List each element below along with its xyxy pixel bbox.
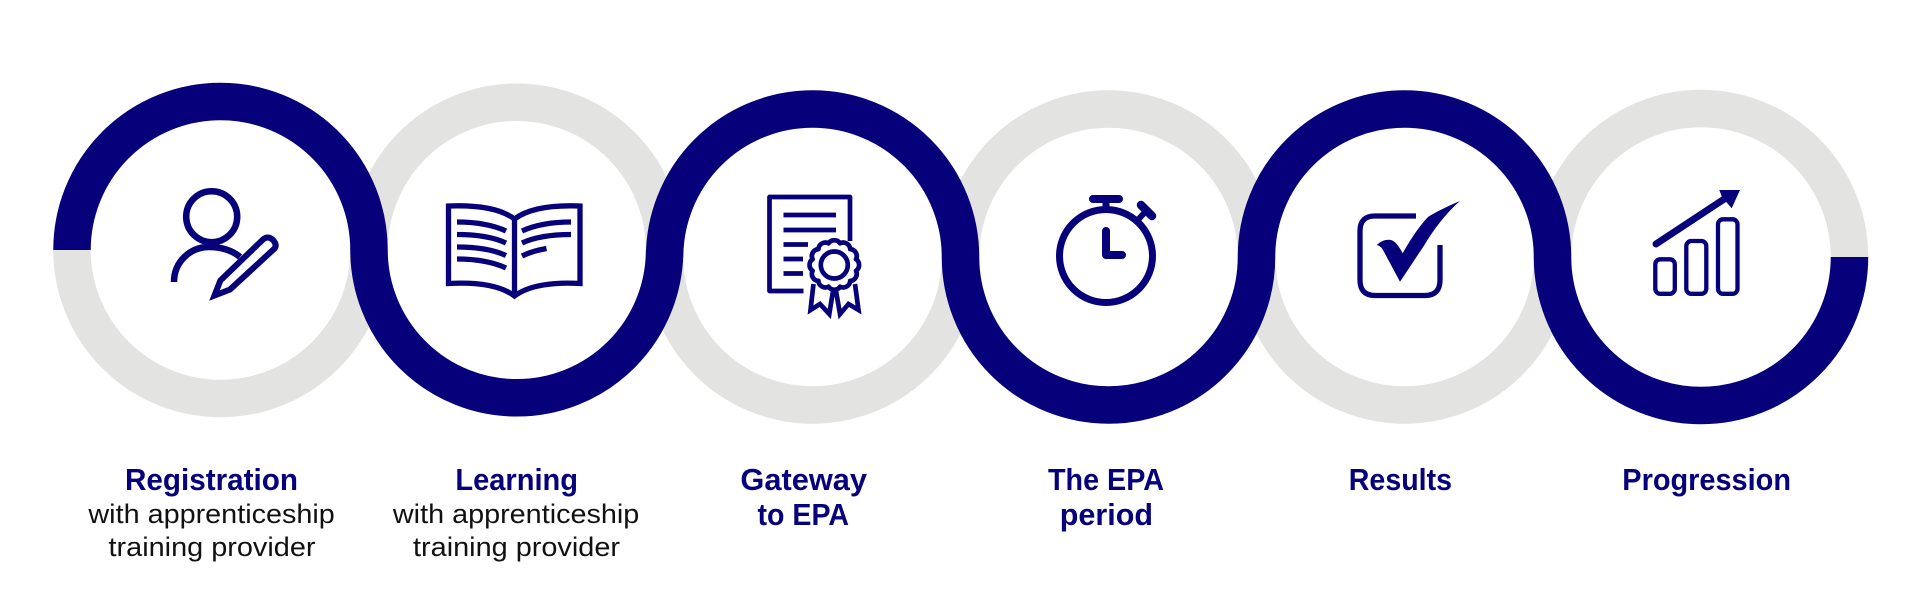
icon: person with pencil bbox=[174, 191, 276, 296]
label: Learning: with apprenticeship bbox=[392, 499, 639, 529]
label: Learning bbox=[392, 462, 639, 562]
label: Registration bbox=[87, 462, 335, 562]
label: The EPA period bbox=[1048, 462, 1164, 532]
icon: rising bar chart bbox=[1655, 190, 1740, 294]
label: Progression: Progression bbox=[1622, 462, 1791, 497]
label: Gateway to EPA: to EPA bbox=[758, 497, 849, 532]
label: Registration: with apprenticeship bbox=[87, 499, 335, 529]
grey ring halves bbox=[72, 102, 1850, 405]
navy wave ribbon bbox=[72, 101, 1850, 405]
icon: open book bbox=[448, 206, 580, 296]
icon: certificate with rosette bbox=[770, 197, 859, 314]
icon: check box bbox=[1360, 201, 1460, 296]
label: Registration: training provider bbox=[108, 532, 316, 562]
label: Gateway to EPA bbox=[740, 462, 868, 532]
label: Learning: training provider bbox=[413, 532, 620, 562]
label: Registration: Registration bbox=[125, 462, 298, 497]
label: Results: Results bbox=[1349, 462, 1452, 497]
label: The EPA period: period bbox=[1060, 497, 1153, 532]
label: The EPA period: The EPA bbox=[1048, 462, 1164, 497]
icon: stopwatch bbox=[1060, 199, 1152, 302]
label: Learning: Learning bbox=[455, 462, 578, 497]
label: Gateway to EPA: Gateway bbox=[740, 462, 868, 497]
